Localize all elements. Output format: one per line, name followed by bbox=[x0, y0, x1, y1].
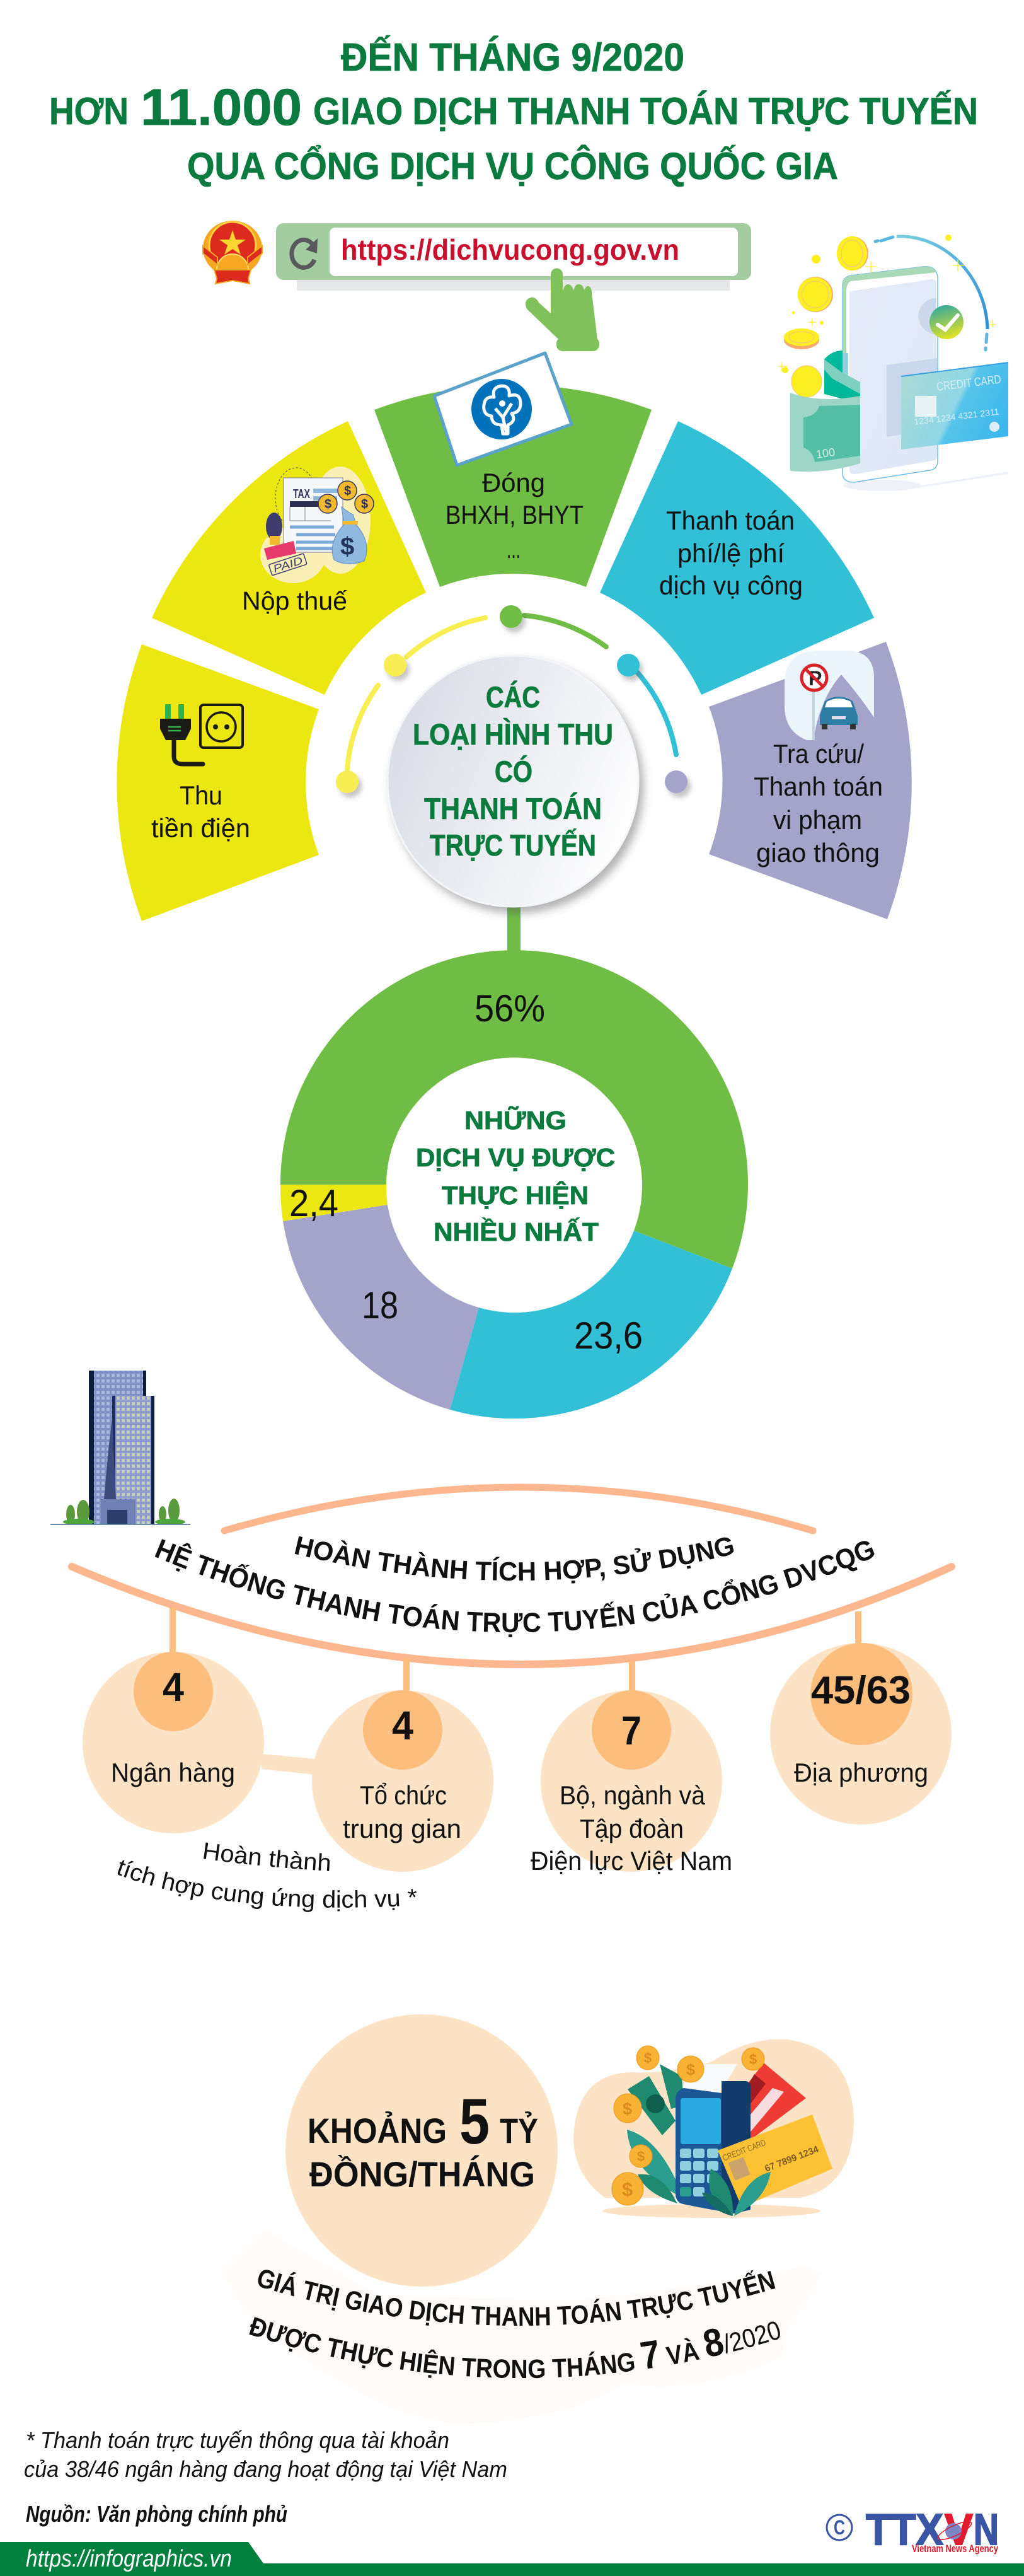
panel: bộ ngành: Tập đoàn bbox=[580, 1814, 684, 1843]
panel: tổ chức trung gian: 4 bbox=[392, 1703, 413, 1748]
icon: office building bbox=[50, 1371, 190, 1525]
title: 11.000 bbox=[141, 79, 302, 136]
icon: payment terminal illustration: $ bbox=[637, 2149, 645, 2164]
icon: tax document: PAID bbox=[272, 554, 304, 575]
logo: TTXVN: V bbox=[945, 2505, 973, 2554]
icon: payment terminal illustration: $ bbox=[749, 2051, 757, 2067]
icon: payment terminal illustration: $ bbox=[686, 2061, 695, 2079]
icon: reload bbox=[292, 238, 318, 267]
ring arcs and dots bbox=[336, 605, 687, 793]
panel: khoảng 5 tỷ đồng/tháng: ĐỒNG/THÁNG bbox=[309, 2154, 535, 2194]
icon: phone payment illustration bbox=[778, 235, 1008, 491]
curved caption: giá trị giao dịch bbox=[249, 2270, 780, 2378]
center circle: các loại hình thu: THANH TOÁN bbox=[424, 792, 602, 825]
panel: địa phương: Địa phương bbox=[794, 1758, 928, 1787]
curved note: hoàn thành tích hợp cung ứng dịch vụ: tích hợp cung ứng dịch vụ * bbox=[117, 1860, 417, 1912]
panel: khoảng 5 tỷ đồng/tháng bbox=[285, 2014, 558, 2287]
panel: sector đóng BHXH, BHYT: BHXH, BHYT bbox=[446, 500, 584, 530]
donut chart: 2,4 bbox=[289, 1182, 338, 1224]
donut chart: THỰC HIỆN bbox=[442, 1181, 589, 1210]
icon: tax document: $ bbox=[344, 484, 351, 498]
panel: sector thu tiền điện bbox=[117, 644, 319, 921]
panel: tổ chức trung gian: Tổ chức bbox=[360, 1780, 447, 1810]
icon: tax document: $ bbox=[325, 497, 331, 511]
icon: payment terminal illustration bbox=[573, 2039, 854, 2218]
center circle: các loại hình thu bbox=[388, 656, 638, 907]
panel: tổ chức trung gian: trung gian bbox=[343, 1814, 461, 1843]
icon: payment terminal illustration: CREDIT CARD bbox=[721, 2137, 767, 2163]
footnote: * Thanh toán trực tuyến thông qua tài khoản bbox=[26, 2427, 449, 2453]
panel: bộ ngành: Bộ, ngành và bbox=[560, 1780, 706, 1810]
arcs header bbox=[72, 1487, 952, 1664]
donut chart: 23,6 bbox=[574, 1314, 643, 1357]
icon: tax document bbox=[260, 467, 374, 583]
curved caption: giá trị giao dịch: ĐƯỢC THỰC HIỆN TRONG THÁNG 7 VÀ 8/2020 bbox=[249, 2317, 780, 2378]
footnote: của 38/46 ngân hàng đang hoạt động tại Việt Nam bbox=[24, 2456, 507, 2482]
curved heading: hoàn thành tích hợp: HỆ THỐNG THANH TOÁN TRỰC TUYẾN CỦA CỔNG DVCQG bbox=[155, 1539, 875, 1637]
footnote bbox=[24, 2427, 507, 2482]
icon: payment terminal illustration: $ bbox=[644, 2050, 652, 2066]
icon: no parking and car bbox=[785, 651, 874, 740]
center circle: các loại hình thu: LOẠI HÌNH THU bbox=[413, 717, 613, 751]
panel: ngân hàng: 4 bbox=[163, 1664, 184, 1710]
title: ĐẾN THÁNG 9/2020 bbox=[341, 36, 684, 79]
title: HƠN bbox=[49, 90, 129, 132]
panel: sector vi phạm giao thông: vi phạm bbox=[773, 805, 862, 835]
icon: payment terminal illustration: 67 7899 1234 bbox=[763, 2144, 820, 2174]
center circle: các loại hình thu: CÁC bbox=[486, 680, 540, 714]
logo: TTXVN bbox=[827, 2505, 999, 2555]
panel: bộ ngành bbox=[531, 1661, 732, 1876]
panel: sector đóng BHXH, BHYT: Đóng bbox=[482, 468, 545, 497]
icon: tax document: $ bbox=[361, 497, 368, 511]
footer band: https://infographics.vn bbox=[26, 2546, 232, 2572]
panel: bộ ngành: Điện lực Việt Nam bbox=[531, 1846, 732, 1876]
panel: sector thu tiền điện: Thu bbox=[180, 780, 222, 810]
source: Nguồn: Văn phòng chính phủ bbox=[26, 2501, 287, 2527]
donut chart: NHIỀU NHẤT bbox=[434, 1217, 599, 1246]
logo: TTXVN: Vietnam News Agency bbox=[912, 2543, 998, 2555]
donut chart: DỊCH VỤ ĐƯỢC bbox=[416, 1143, 615, 1172]
icon: insurance card bbox=[434, 353, 572, 465]
panel: sector nộp thuế bbox=[152, 421, 426, 695]
icon: phone payment illustration: 1234 1234 4321 2311 bbox=[913, 406, 1000, 427]
icon: tax document: $ bbox=[340, 533, 354, 560]
donut chart bbox=[280, 950, 748, 1419]
icon: national emblem bbox=[203, 221, 262, 284]
center circle: các loại hình thu: TRỰC TUYẾN bbox=[430, 828, 596, 862]
panel: sector vi phạm giao thông: giao thông bbox=[756, 838, 880, 867]
curved heading: hoàn thành tích hợp: HOÀN THÀNH TÍCH HỢP, SỬ DỤNG bbox=[295, 1536, 733, 1584]
address bar: https://dichvucong.gov.vn bbox=[341, 233, 679, 266]
panel: tổ chức trung gian bbox=[312, 1658, 493, 1872]
panel: sector thanh toán phí: phí/lệ phí bbox=[677, 538, 785, 568]
panel: địa phương bbox=[770, 1611, 952, 1825]
donut chart: NHỮNG bbox=[464, 1106, 567, 1135]
panel: khoảng 5 tỷ đồng/tháng: TỶ bbox=[500, 2111, 538, 2150]
panel: địa phương: 45/63 bbox=[811, 1669, 911, 1712]
panel: sector nộp thuế: Nộp thuế bbox=[242, 586, 347, 615]
panel: sector thanh toán phí: dịch vụ công bbox=[659, 571, 803, 600]
logo: TTXVN: TTX bbox=[866, 2505, 943, 2554]
panel: khoảng 5 tỷ đồng/tháng: KHOẢNG bbox=[308, 2111, 447, 2150]
icon: phone payment illustration: 100 bbox=[815, 446, 836, 461]
logo: TTXVN: C bbox=[834, 2516, 845, 2539]
title: QUA CỔNG DỊCH VỤ CÔNG QUỐC GIA bbox=[187, 145, 838, 187]
icon: tax document: TAX bbox=[293, 487, 310, 501]
icon: phone payment illustration: CREDIT CARD bbox=[936, 373, 1002, 394]
connector bar bbox=[507, 902, 521, 952]
panel: sector vi phạm giao thông: Thanh toán bbox=[754, 772, 883, 801]
center circle: các loại hình thu: CÓ bbox=[495, 755, 532, 788]
curved note: hoàn thành tích hợp cung ứng dịch vụ: Hoàn thành bbox=[204, 1842, 330, 1871]
curved caption: giá trị giao dịch: GIÁ TRỊ GIAO DỊCH THANH TOÁN TRỰC TUYẾN bbox=[258, 2270, 775, 2326]
panel: sector thanh toán phí: Thanh toán bbox=[666, 506, 795, 535]
donut chart: 56% bbox=[475, 987, 545, 1030]
icon: payment terminal illustration: $ bbox=[623, 2099, 632, 2118]
icon: plug and socket bbox=[160, 704, 243, 764]
donut chart: 18 bbox=[362, 1284, 398, 1326]
panel: ngân hàng bbox=[83, 1608, 264, 1833]
icon: pointing hand bbox=[526, 269, 599, 351]
title bbox=[49, 36, 978, 187]
icon: no parking and car: P bbox=[808, 667, 822, 690]
icon: payment terminal illustration: $ bbox=[622, 2178, 633, 2200]
panel: khoảng 5 tỷ đồng/tháng: 5 bbox=[459, 2086, 490, 2157]
logo: TTXVN: N bbox=[974, 2505, 999, 2554]
panel: sector đóng BHXH, BHYT bbox=[374, 353, 652, 587]
title: GIAO DỊCH THANH TOÁN TRỰC TUYẾN bbox=[313, 90, 978, 132]
panel: sector thanh toán phí bbox=[600, 421, 874, 695]
footer band bbox=[0, 2542, 1024, 2576]
panel: sector vi phạm giao thông bbox=[709, 642, 912, 919]
panel: bộ ngành: 7 bbox=[621, 1708, 641, 1753]
address bar bbox=[276, 223, 751, 291]
panel: sector thu tiền điện: tiền điện bbox=[151, 813, 250, 843]
panel: sector vi phạm giao thông: Tra cứu/ bbox=[773, 739, 864, 769]
pale brush background bbox=[221, 2229, 821, 2424]
panel: sector đóng BHXH, BHYT: ... bbox=[507, 534, 521, 564]
connector between circles bbox=[262, 1754, 315, 1775]
panel: ngân hàng: Ngân hàng bbox=[111, 1758, 235, 1787]
